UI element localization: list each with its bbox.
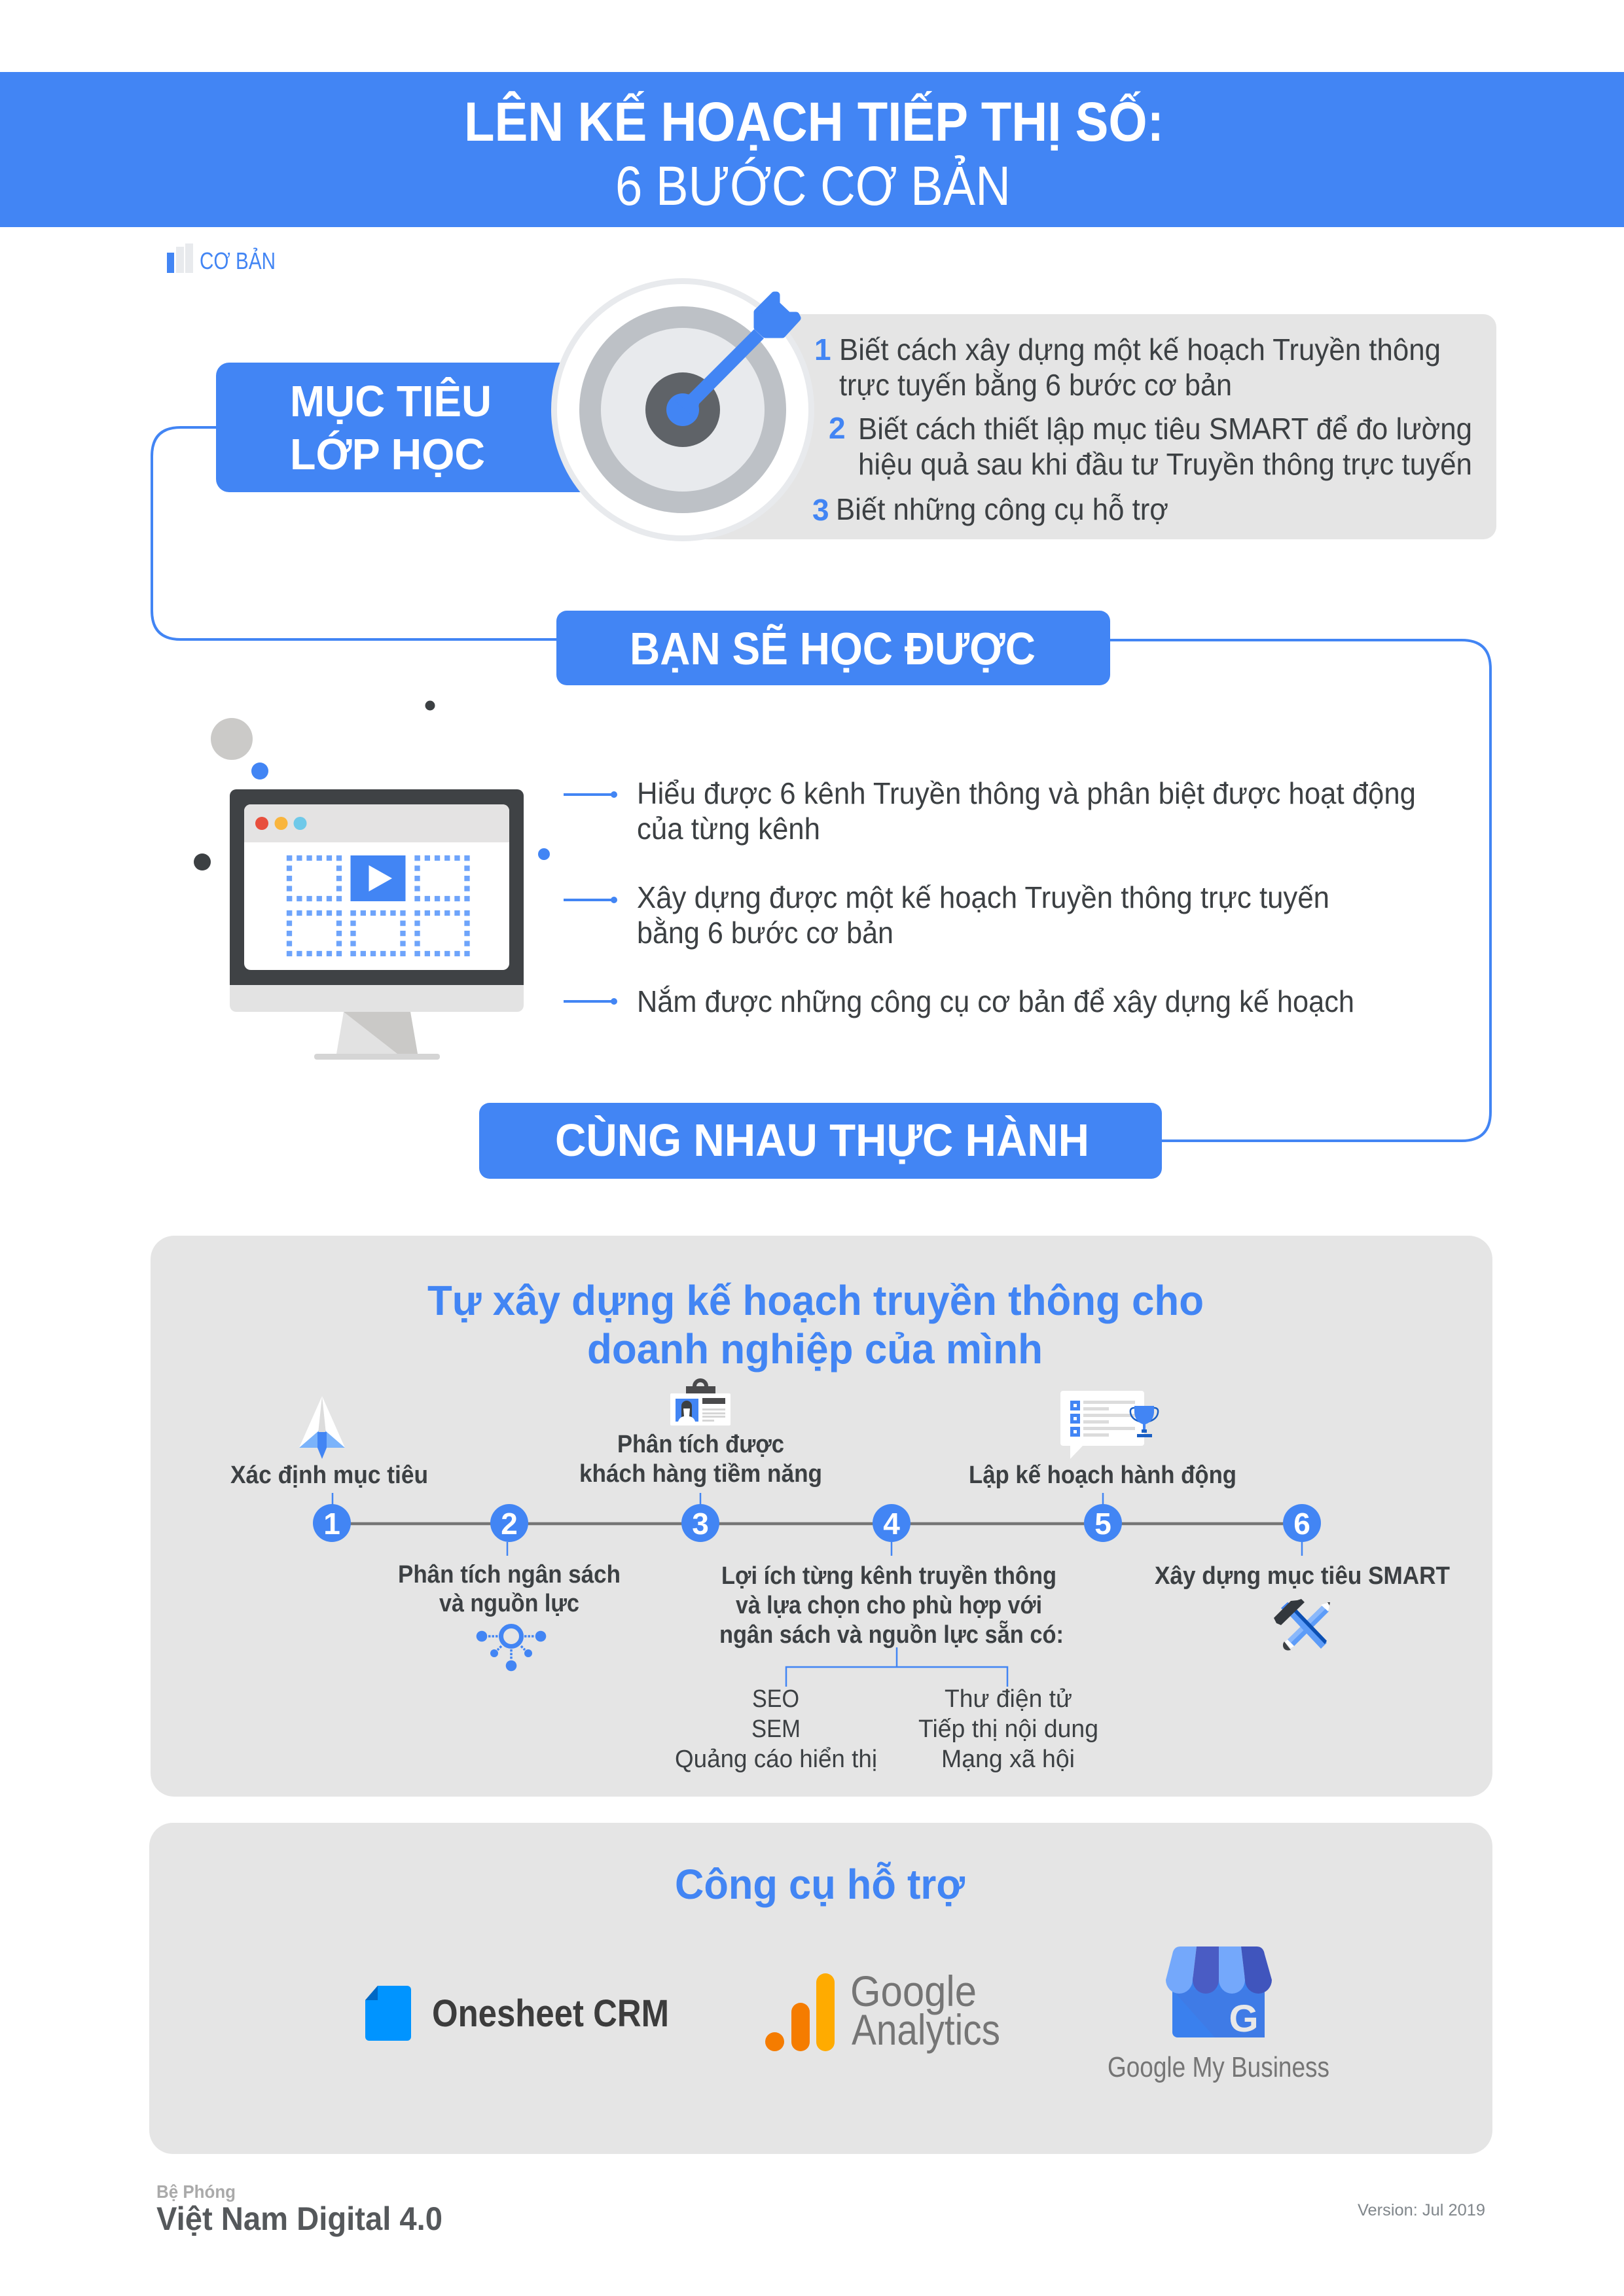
- learning outcomes list: [564, 776, 1416, 1018]
- timeline: [313, 1493, 1321, 1556]
- heading box: cùng nhau thực hành: CÙNG NHAU THỰC HÀNH: [555, 1115, 1089, 1166]
- step 4: lợi ích từng kênh: và lựa chọn cho phù hợp với: [736, 1592, 1042, 1619]
- connector lines: [152, 427, 1490, 1141]
- practice heading: doanh nghiệp của mình: [587, 1325, 1043, 1372]
- icon: paper plane: [299, 1396, 345, 1459]
- objective 1: 1: [814, 332, 831, 367]
- outcome 1: [564, 776, 1416, 846]
- channel list left: SEM: [751, 1715, 801, 1743]
- footer: publisher: [156, 2181, 442, 2237]
- practice heading: Tự xây dựng kế hoạch truyền thông cho: [427, 1277, 1204, 1324]
- channel list right: Thư điện tử: [945, 1685, 1072, 1713]
- timeline: 4: [883, 1507, 900, 1541]
- outcome 2: bằng 6 bước cơ bản: [637, 916, 893, 950]
- logo: google analytics: [765, 1967, 1000, 2054]
- logo: google analytics: Google: [850, 1967, 977, 2015]
- heading box: mục tiêu lớp học: MỤC TIÊU: [290, 377, 492, 426]
- logo: google analytics: Analytics: [852, 2005, 1000, 2054]
- timeline: 5: [1094, 1507, 1111, 1541]
- icon: checklist with trophy: [1060, 1391, 1158, 1459]
- step 4: lợi ích từng kênh: Lợi ích từng kênh truyền thông: [721, 1562, 1056, 1590]
- panel: objectives list: [681, 314, 1496, 539]
- channel list left: Quảng cáo hiển thị: [675, 1746, 877, 1773]
- level badge: cơ bản: CƠ BẢN: [200, 247, 276, 274]
- step 2: phân tích ngân sách: và nguồn lực: [439, 1590, 579, 1617]
- decorative dots: [194, 700, 550, 870]
- header banner: [0, 72, 1624, 227]
- footer: publisher: Việt Nam Digital 4.0: [156, 2200, 442, 2237]
- outcome 2: [564, 880, 1329, 950]
- step 3: phân tích khách hàng: [579, 1431, 822, 1488]
- bracket connector: [786, 1647, 1007, 1687]
- timeline: 6: [1293, 1507, 1310, 1541]
- objective 2: [829, 411, 1472, 481]
- logo: onesheet crm: Onesheet CRM: [432, 1992, 669, 2035]
- footer: version: Version: Jul 2019: [1358, 2201, 1485, 2219]
- objective 2: 2: [829, 411, 846, 445]
- panel: practice: [151, 1236, 1492, 1797]
- objective 2: Biết cách thiết lập mục tiêu SMART để đo lường: [858, 412, 1472, 446]
- panel: support tools: [149, 1823, 1492, 2154]
- step 6: xây dựng mục tiêu smart: Xây dựng mục tiêu SMART: [1155, 1562, 1450, 1590]
- step 4: lợi ích từng kênh: ngân sách và nguồn lực sẵn có:: [719, 1620, 1064, 1649]
- channel list left: SEO: [752, 1685, 799, 1713]
- heading box: mục tiêu lớp học: LỚP HỌC: [290, 430, 485, 479]
- logo: google my business: [1108, 1946, 1329, 2083]
- logo: onesheet crm: [365, 1986, 669, 2041]
- step 3: phân tích khách hàng: khách hàng tiềm năng: [579, 1460, 822, 1488]
- step 3: phân tích khách hàng: Phân tích được: [617, 1431, 784, 1458]
- outcome 2: Xây dựng được một kế hoạch Truyền thông trực tuyến: [637, 880, 1329, 914]
- step 1: xác định mục tiêu: Xác định mục tiêu: [230, 1462, 428, 1489]
- heading box: bạn sẽ học được: [556, 611, 1110, 685]
- step 5: lập kế hoạch hành động: Lập kế hoạch hành động: [969, 1462, 1236, 1489]
- outcome 1: của từng kênh: [637, 812, 820, 846]
- objective 2: hiệu quả sau khi đầu tư Truyền thông trực tuyến: [858, 447, 1472, 481]
- tools heading: Công cụ hỗ trợ: [675, 1861, 965, 1908]
- title: 6 BƯỚC CƠ BẢN: [615, 155, 1011, 217]
- channel list left: [675, 1685, 877, 1773]
- timeline: 2: [501, 1507, 518, 1541]
- icon: hammer and pencil: [1274, 1599, 1330, 1651]
- icon: id card: [670, 1380, 731, 1426]
- icon: network: [477, 1626, 546, 1671]
- level badge: cơ bản: [167, 243, 276, 274]
- heading box: bạn sẽ học được: BẠN SẼ HỌC ĐƯỢC: [630, 623, 1036, 674]
- timeline: 1: [323, 1507, 340, 1541]
- timeline: 3: [692, 1507, 709, 1541]
- icon: target with arrow: [551, 278, 814, 541]
- objective 1: trực tuyến bằng 6 bước cơ bản: [839, 368, 1232, 402]
- outcome 1: Hiểu được 6 kênh Truyền thông và phân biệt được hoạt động: [637, 776, 1416, 810]
- footer: publisher: Bệ Phóng: [156, 2181, 236, 2202]
- step 2: phân tích ngân sách: Phân tích ngân sách: [398, 1561, 621, 1588]
- logo: google my business: G: [1229, 1998, 1259, 2040]
- objective 1: [814, 332, 1441, 402]
- step 2: phân tích ngân sách: [398, 1561, 621, 1617]
- channel list right: Tiếp thị nội dung: [918, 1715, 1098, 1743]
- heading box: mục tiêu lớp học: [216, 363, 635, 492]
- heading box: cùng nhau thực hành: [479, 1103, 1162, 1179]
- channel list right: [918, 1685, 1098, 1773]
- step 4: lợi ích từng kênh: [719, 1562, 1064, 1649]
- outcome 3: Nắm được những công cụ cơ bản để xây dựng kế hoạch: [637, 984, 1354, 1018]
- title: [464, 91, 1164, 217]
- objective 1: Biết cách xây dựng một kế hoạch Truyền thông: [839, 332, 1441, 367]
- channel list right: Mạng xã hội: [941, 1746, 1075, 1773]
- icon: desktop monitor: [230, 789, 524, 1060]
- practice heading: [427, 1277, 1204, 1372]
- objective 3: Biết những công cụ hỗ trợ: [836, 492, 1168, 526]
- logo: google my business: Google My Business: [1108, 2051, 1329, 2083]
- objective 3: 3: [812, 493, 829, 527]
- title: LÊN KẾ HOẠCH TIẾP THỊ SỐ:: [464, 91, 1164, 152]
